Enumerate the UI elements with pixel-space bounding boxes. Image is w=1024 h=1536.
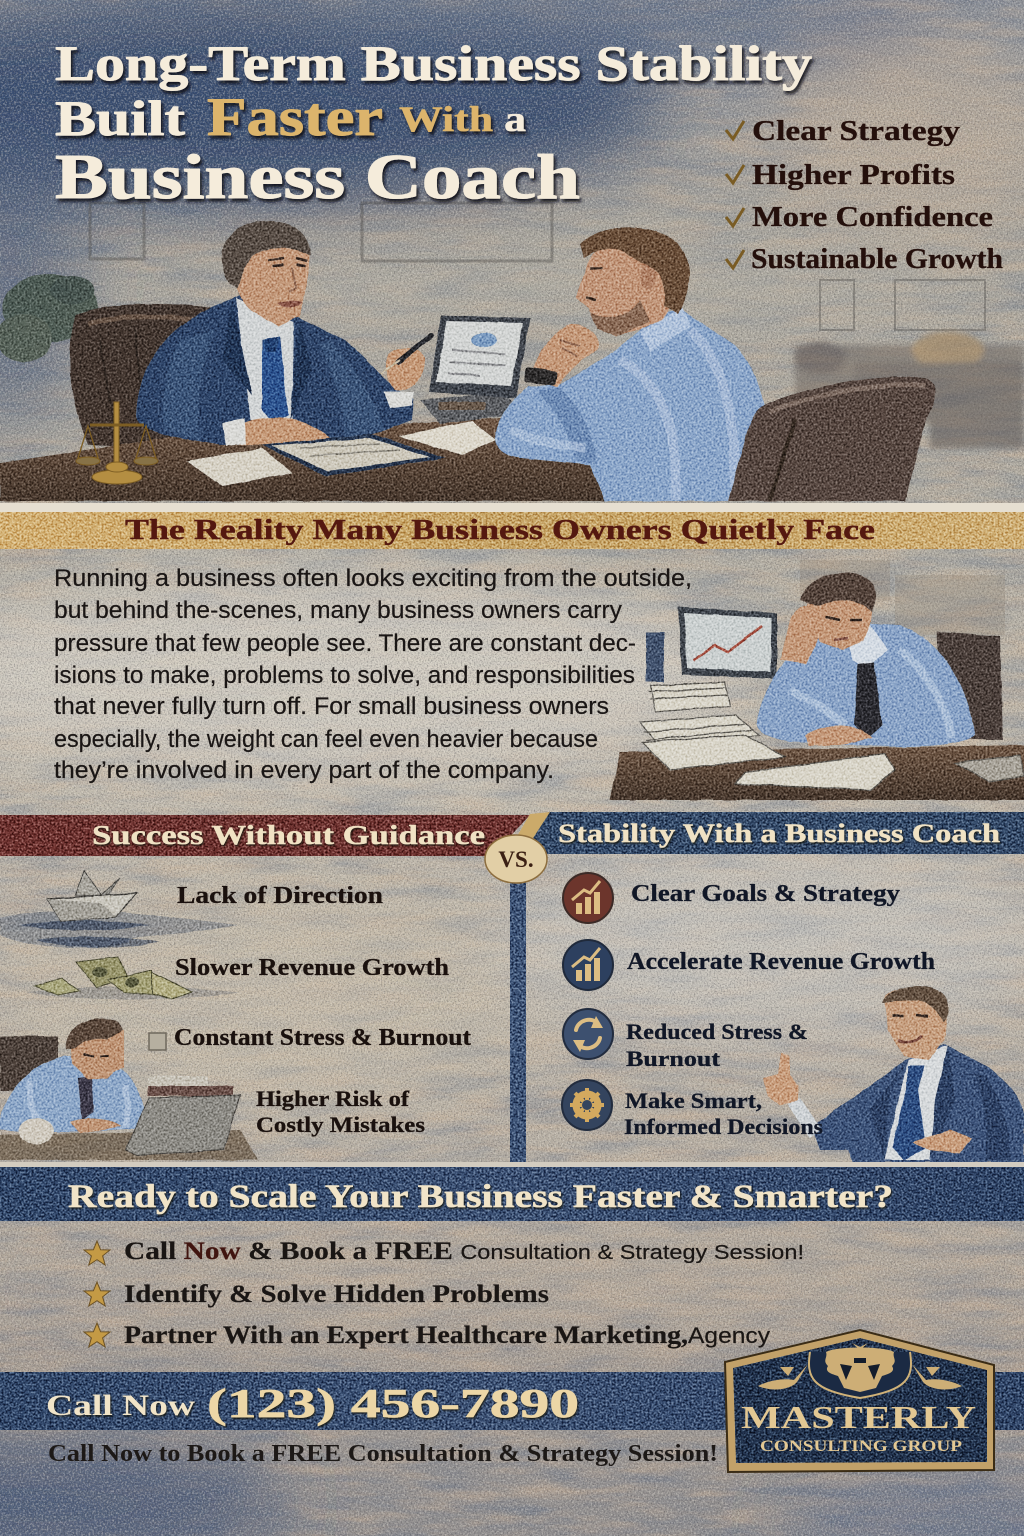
laurel right bbox=[912, 1364, 962, 1389]
list: with coach items: Informed Decisions bbox=[624, 1114, 823, 1139]
illustration: confident coach with thumbs up bbox=[763, 986, 1024, 1162]
text block: reality paragraph: pressure that few people see. There are constant dec- bbox=[54, 630, 636, 657]
plant bbox=[0, 274, 98, 362]
list: with coach items: Burnout bbox=[626, 1046, 721, 1071]
badge: vs bbox=[485, 835, 547, 883]
figure bbox=[0, 1018, 147, 1144]
list: with coach items: Accelerate Revenue Growth bbox=[627, 949, 935, 975]
header text right: Stability With a Business Coach bbox=[558, 819, 1001, 848]
bullet one: Call Now & Book a FREE Consultation & Strategy Session! bbox=[124, 1238, 804, 1265]
client shirt bbox=[495, 310, 771, 501]
list: with coach items: Clear Goals & Strategy bbox=[631, 881, 900, 907]
background shelves and furniture bbox=[794, 332, 1024, 448]
list: with coach items bbox=[624, 881, 935, 1139]
checklist text bbox=[751, 115, 1003, 275]
icon: brass scales of justice bbox=[76, 402, 158, 484]
client hand and forearm bbox=[530, 324, 599, 388]
desk papers and clipboard bbox=[186, 421, 496, 486]
list: without guidance items bbox=[174, 883, 471, 1137]
heading text: The Reality Many Business Owners Quietly Face bbox=[125, 514, 875, 546]
icon: check marks bbox=[726, 121, 744, 268]
comparison divider bar bbox=[510, 880, 526, 1162]
coach hands and pen bbox=[386, 348, 425, 391]
desk bbox=[0, 418, 618, 501]
text block: reality paragraph: that never fully turn off. For small business owners bbox=[54, 693, 609, 720]
text block: reality paragraph: Running a business often looks exciting from the outside, bbox=[54, 565, 692, 592]
coach shirt and tie bbox=[236, 298, 294, 425]
tablet on stand bbox=[420, 315, 530, 424]
desk objects bbox=[148, 1076, 233, 1096]
checklist text: More Confidence bbox=[752, 201, 993, 233]
list: with coach items: Make Smart, bbox=[625, 1088, 762, 1113]
coach face details bbox=[268, 258, 307, 261]
client leather chair bbox=[728, 377, 936, 501]
icon: gear bbox=[562, 1080, 612, 1130]
wall notes bbox=[800, 560, 1005, 635]
call now label: Call Now bbox=[46, 1389, 195, 1422]
crest emblem bbox=[825, 1343, 895, 1392]
office wall decor bbox=[90, 203, 985, 330]
checklist text: Sustainable Growth bbox=[751, 243, 1003, 275]
text block: reality paragraph bbox=[54, 565, 692, 784]
chair bbox=[0, 1036, 58, 1091]
list: without guidance items: Slower Revenue Growth bbox=[175, 955, 449, 981]
suit bbox=[812, 1044, 1024, 1162]
phone number: (123) 456-7890 bbox=[207, 1380, 579, 1426]
icon: paper boat on rough water bbox=[0, 870, 238, 948]
band: call to action heading bbox=[0, 1162, 1024, 1221]
shirt and tie bbox=[884, 1045, 948, 1160]
bullet two: Identify & Solve Hidden Problems bbox=[124, 1281, 549, 1308]
laptop bbox=[125, 1095, 240, 1155]
logo subline: CONSULTING GROUP bbox=[760, 1438, 963, 1455]
illustration: stressed owner at desk bbox=[610, 560, 1024, 800]
text block: reality paragraph: isions to make, problems to solve, and responsibilities bbox=[54, 662, 635, 689]
desk bbox=[610, 745, 1024, 800]
title line two: Built bbox=[55, 90, 185, 146]
header: success without guidance bbox=[0, 815, 530, 856]
header text left: Success Without Guidance bbox=[92, 820, 485, 850]
chair bbox=[936, 632, 1003, 740]
title line three: Business Coach bbox=[55, 141, 580, 212]
shirt cuff bbox=[786, 1098, 822, 1138]
icon: scattered dollar bills bbox=[25, 957, 240, 1000]
logo: masterly consulting group bbox=[725, 1330, 994, 1472]
crest shield bbox=[809, 1352, 911, 1398]
lower hand bbox=[912, 1130, 972, 1154]
leather chair behind coach bbox=[70, 304, 212, 450]
CTA heading text: Ready to Scale Your Business Faster & Smarter? bbox=[68, 1179, 893, 1215]
band: phone number bbox=[0, 1372, 1024, 1430]
logo wordmark: MASTERLY bbox=[741, 1399, 976, 1435]
icon: cycle arrows bbox=[563, 1009, 613, 1059]
list: with coach items: Reduced Stress & bbox=[626, 1019, 808, 1044]
title bbox=[55, 35, 812, 212]
header: stability with a business coach bbox=[506, 812, 1024, 855]
coach, left figure bbox=[136, 221, 432, 450]
desk bbox=[0, 1130, 258, 1160]
coach suit bbox=[136, 293, 414, 445]
list: without guidance items: Constant Stress & Burnout bbox=[174, 1025, 471, 1051]
illustration: stressed man at laptop bbox=[0, 1018, 258, 1160]
monitor bbox=[646, 607, 777, 682]
icon: star two bbox=[84, 1282, 110, 1306]
text block: reality paragraph: they’re involved in every part of the company. bbox=[54, 757, 554, 784]
tagline: Call Now to Book a FREE Consultation & Strategy Session! bbox=[48, 1441, 718, 1467]
client head bbox=[576, 242, 674, 336]
icon: chart in blue circle bbox=[563, 940, 613, 990]
thumbs up hand bbox=[763, 1052, 798, 1106]
band: reality section heading bbox=[0, 503, 1024, 549]
checklist text: Higher Profits bbox=[752, 159, 955, 191]
coach head bbox=[232, 222, 309, 326]
text block: reality paragraph: but behind the-scenes, many business owners carry bbox=[54, 597, 622, 624]
stacked papers bbox=[640, 682, 1024, 790]
badge: vs: VS. bbox=[498, 847, 534, 872]
laurel left bbox=[758, 1364, 808, 1389]
client, right figure bbox=[495, 228, 771, 501]
icon: small note square bbox=[149, 1033, 166, 1050]
list: without guidance items: Lack of Direction bbox=[177, 883, 383, 909]
owner figure bbox=[757, 573, 975, 747]
checklist text: Clear Strategy bbox=[752, 115, 961, 147]
list: benefits checklist bbox=[726, 115, 1003, 275]
list: without guidance items: Costly Mistakes bbox=[256, 1112, 425, 1137]
title line one: Long-Term Business Stability bbox=[55, 35, 812, 91]
title highlight: Faster bbox=[207, 87, 383, 147]
list: call to action bullets bbox=[84, 1238, 804, 1349]
panel: hero scene, coach and client at a desk bbox=[0, 203, 1024, 501]
title connector: With a bbox=[399, 99, 526, 139]
text block: reality paragraph: especially, the weight can feel even heavier because bbox=[54, 726, 598, 753]
bullet three: Partner With an Expert Healthcare Marketing, Agency bbox=[124, 1322, 770, 1349]
list: without guidance items: Higher Risk of bbox=[256, 1086, 410, 1111]
icon: star three bbox=[84, 1323, 110, 1347]
head bbox=[884, 988, 947, 1060]
icon: star bbox=[84, 1241, 110, 1265]
icon: chart in red circle bbox=[563, 873, 613, 923]
